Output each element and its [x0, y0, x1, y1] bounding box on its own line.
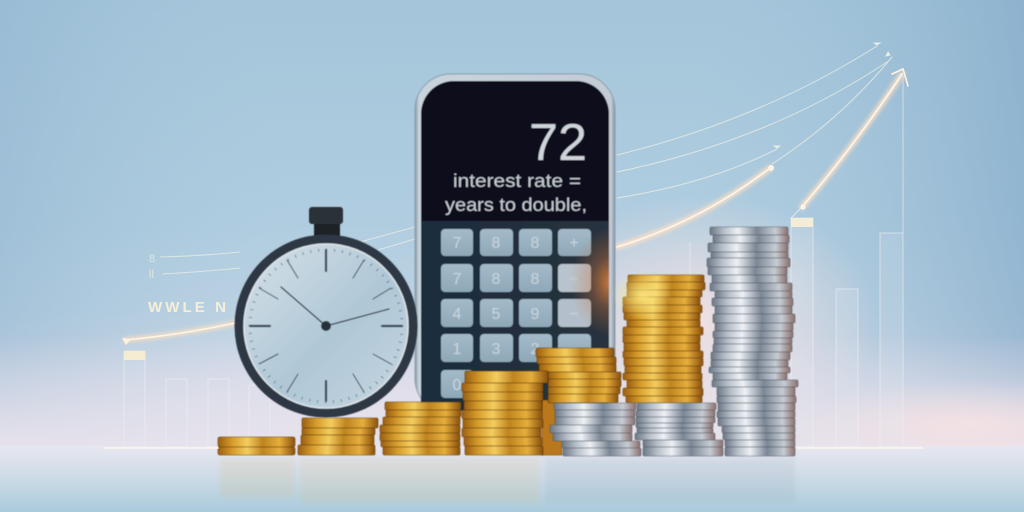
calculator keys: 8: [531, 271, 540, 288]
left chart labels: ll: [149, 269, 154, 281]
calculator keys: [441, 229, 591, 398]
display text line 1: interest rate =: [453, 170, 581, 191]
hour ticks: [250, 250, 402, 401]
gold stack A: [218, 437, 295, 455]
calculator keys: 4: [453, 306, 462, 323]
calculator keys: 8: [531, 235, 540, 252]
calculator keys: 7: [453, 235, 462, 252]
stopwatch: [234, 207, 418, 418]
floor glow lines: [105, 447, 922, 449]
calculator keypad: [421, 221, 609, 411]
left growth lines: [160, 227, 415, 274]
silver stack right: [707, 227, 798, 456]
stopwatch hands: [281, 287, 389, 331]
glowing growth arrows: [617, 69, 908, 247]
calculator keys: 2: [531, 341, 540, 358]
silver stack middle right: [635, 403, 723, 456]
left bar chart outlines: [124, 351, 270, 447]
left chart labels: [148, 253, 226, 316]
calculator keys: 8: [492, 271, 501, 288]
gold stack D: [462, 371, 548, 455]
minute ticks: [250, 250, 402, 402]
calculator keys: 9: [531, 306, 540, 323]
calculator keys: 1: [453, 341, 462, 358]
right bar chart outlines: [690, 75, 903, 447]
display text line 2: years to double,: [445, 194, 587, 215]
gold stack C: [380, 402, 461, 455]
calculator screen: [421, 81, 609, 221]
orange light glow: [573, 231, 610, 333]
stopwatch crown: [309, 207, 343, 238]
floor reflections: [220, 458, 795, 503]
display number: 72: [529, 114, 587, 172]
calculator body: [415, 74, 615, 414]
stopwatch case: [234, 234, 418, 418]
gold stack medium: [536, 348, 621, 455]
left glowing growth arrow: [122, 322, 240, 345]
stopwatch face: [244, 244, 408, 408]
calculator keys: 8: [492, 235, 501, 252]
calculator keys: −: [569, 341, 579, 358]
gold stack tall: [623, 275, 705, 403]
calculator keys: 5: [492, 306, 501, 323]
calculator keys: 7: [453, 271, 462, 288]
left chart labels: 8: [149, 253, 155, 265]
calculator: [414, 73, 616, 415]
right growth curves: [617, 43, 892, 198]
calculator keys: −: [569, 306, 579, 323]
calculator keys: ÷: [570, 271, 579, 288]
calculator keys: 0: [453, 377, 462, 394]
left chart labels: WWLE N: [148, 299, 226, 316]
calculator keys: +: [569, 235, 579, 252]
silver stack middle: [550, 403, 641, 456]
calculator keys: 3: [492, 341, 501, 358]
gold stack B: [298, 418, 378, 455]
gold highlight: [612, 271, 672, 319]
